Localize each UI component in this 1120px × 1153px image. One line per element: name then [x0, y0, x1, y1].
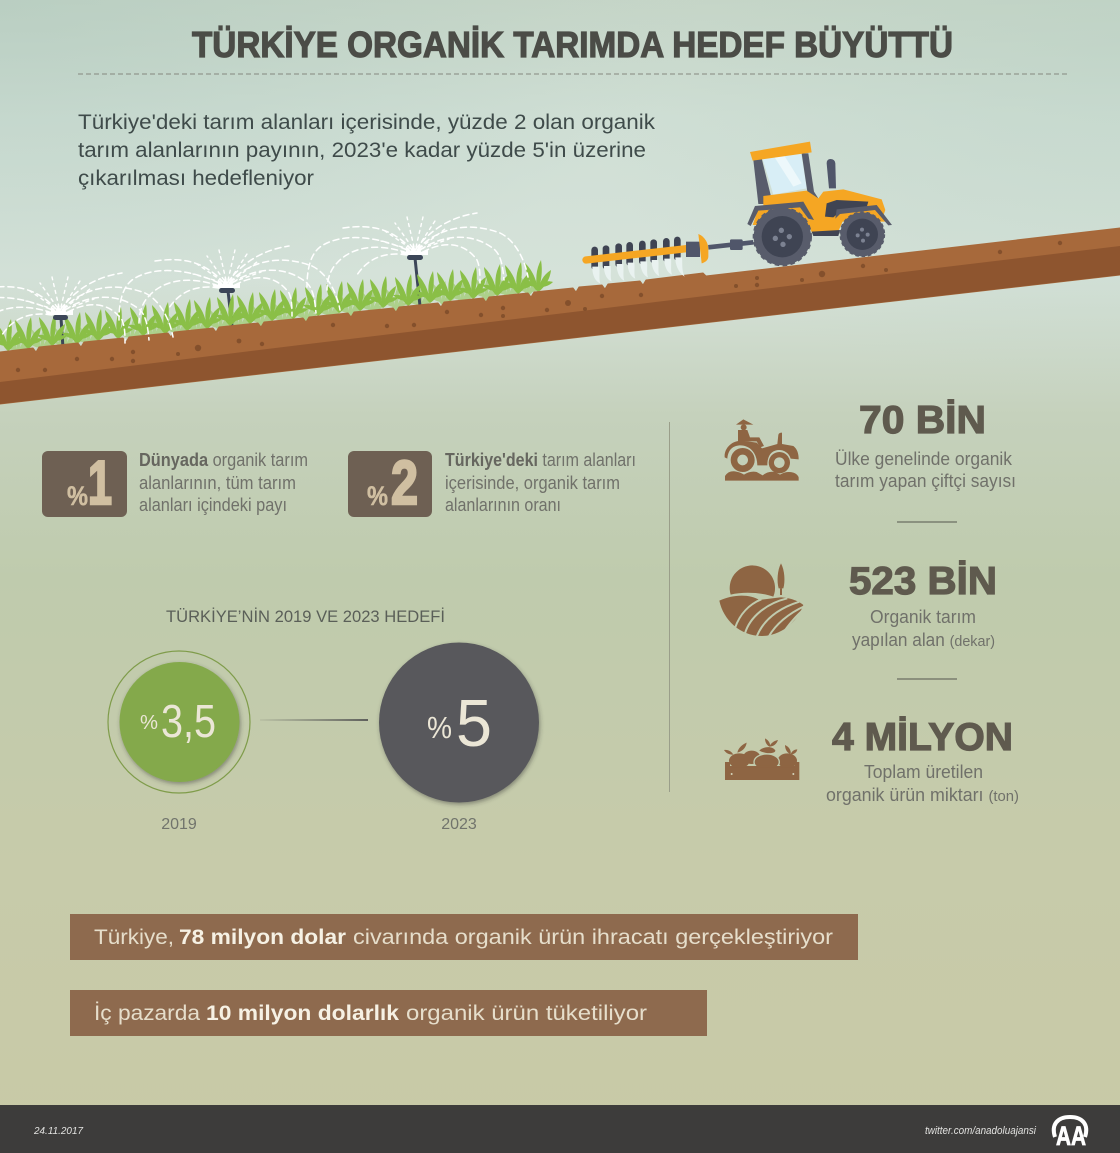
- exhaust: [827, 159, 836, 188]
- banner: export: [70, 914, 858, 960]
- intro text: [78, 110, 655, 190]
- cab: [753, 158, 771, 204]
- plough: [586, 234, 753, 283]
- logo: [1054, 1117, 1086, 1151]
- circle 2019: 3,5: [161, 695, 216, 747]
- connector: [260, 719, 368, 721]
- text: turkey share: alanlarının oranı: [445, 495, 561, 515]
- title: TÜRKİYE ORGANİK TARIMDA HEDEF BÜYÜTTÜ: [192, 24, 953, 65]
- year 2019: 2019: [161, 816, 197, 833]
- stat: 70 bin: tarım yapan çiftçi sayısı: [835, 471, 1016, 491]
- logo: AA: [1056, 1121, 1086, 1151]
- plants: front row: [0, 260, 553, 351]
- intro text: çıkarılması hedefleniyor: [78, 166, 314, 190]
- date: 24.11.2017: [33, 1126, 83, 1137]
- sprinkler middle: [119, 246, 340, 323]
- fenders: [747, 202, 814, 226]
- footer: [0, 1105, 1120, 1153]
- stat: 4 milyon: Toplam üretilen: [864, 762, 983, 782]
- stat box: 1 percent: 1: [88, 449, 112, 518]
- twitter handle: twitter.com/anadoluajansi: [925, 1125, 1036, 1137]
- circle 2019: [108, 651, 250, 793]
- banner: export: civarında organik ürün ihracatı gerçekleştiriyor: [353, 926, 833, 949]
- text: world share: alanları içindeki payı: [139, 495, 287, 515]
- text: world share: alanlarının, tüm tarım: [139, 473, 296, 493]
- front wheel: [840, 212, 884, 256]
- icon: fruit crate: [724, 738, 799, 780]
- intro text: Türkiye'deki tarım alanları içerisinde, yüzde 2 olan organik: [78, 110, 655, 134]
- tractor and plough: [586, 142, 892, 283]
- stat box: 1 percent: %: [67, 481, 88, 511]
- text: turkey share: [445, 450, 636, 515]
- banner: export: 78 milyon dolar: [179, 926, 346, 949]
- stat box: 2 percent: 2: [391, 449, 418, 518]
- stat: 4 milyon: organik ürün miktarı (ton): [826, 785, 1019, 805]
- banner: domestic: [70, 990, 707, 1036]
- stat: 523 bin: 523 BİN: [849, 560, 997, 603]
- stat box: 2 percent: [348, 449, 432, 518]
- text: turkey share: içerisinde, organik tarım: [445, 473, 620, 493]
- sprinkler left: [0, 273, 173, 350]
- plants: back row: [6, 271, 540, 355]
- stat: 70 bin: [835, 399, 1016, 491]
- soil: [0, 228, 1120, 404]
- stat: 523 bin: yapılan alan (dekar): [852, 630, 995, 650]
- text: turkey share: Türkiye'deki tarım alanları: [445, 450, 636, 470]
- circle 2023: %: [427, 710, 452, 745]
- sprinkler right: [307, 213, 528, 290]
- icon: farmer on tractor: [725, 419, 799, 481]
- stat: 70 bin: Ülke genelinde organik: [835, 449, 1013, 469]
- icon: sun and fields: [719, 563, 805, 637]
- stat: 4 milyon: [826, 716, 1019, 805]
- stat: 523 bin: Organik tarım: [870, 607, 976, 627]
- circle 2023: 5: [456, 686, 492, 761]
- body: [763, 189, 885, 235]
- stat: 70 bin: 70 BİN: [859, 399, 986, 442]
- year 2023: 2023: [441, 816, 477, 833]
- banner: domestic: 10 milyon dolarlık: [206, 1002, 399, 1025]
- banner: export: Türkiye,: [94, 926, 174, 949]
- text: world share: Dünyada organik tarım: [139, 450, 308, 470]
- text: world share: [139, 450, 308, 515]
- banner: domestic: İç pazarda: [94, 1002, 200, 1025]
- stat: 523 bin: [849, 560, 997, 650]
- circle 2019: %: [140, 712, 158, 734]
- rear wheel: [754, 208, 811, 265]
- stat box: 2 percent: %: [367, 481, 388, 511]
- sprinkler stems: [61, 258, 420, 348]
- intro text: tarım alanlarının payının, 2023'e kadar yüzde 5'in üzerine: [78, 138, 646, 162]
- circle 2023: [379, 642, 539, 802]
- target heading: TÜRKİYE’NİN 2019 VE 2023 HEDEFİ: [166, 607, 445, 626]
- stat: 4 milyon: 4 MİLYON: [832, 716, 1013, 759]
- banner: domestic: organik ürün tüketiliyor: [406, 1002, 647, 1025]
- stat box: 1 percent: [42, 449, 127, 518]
